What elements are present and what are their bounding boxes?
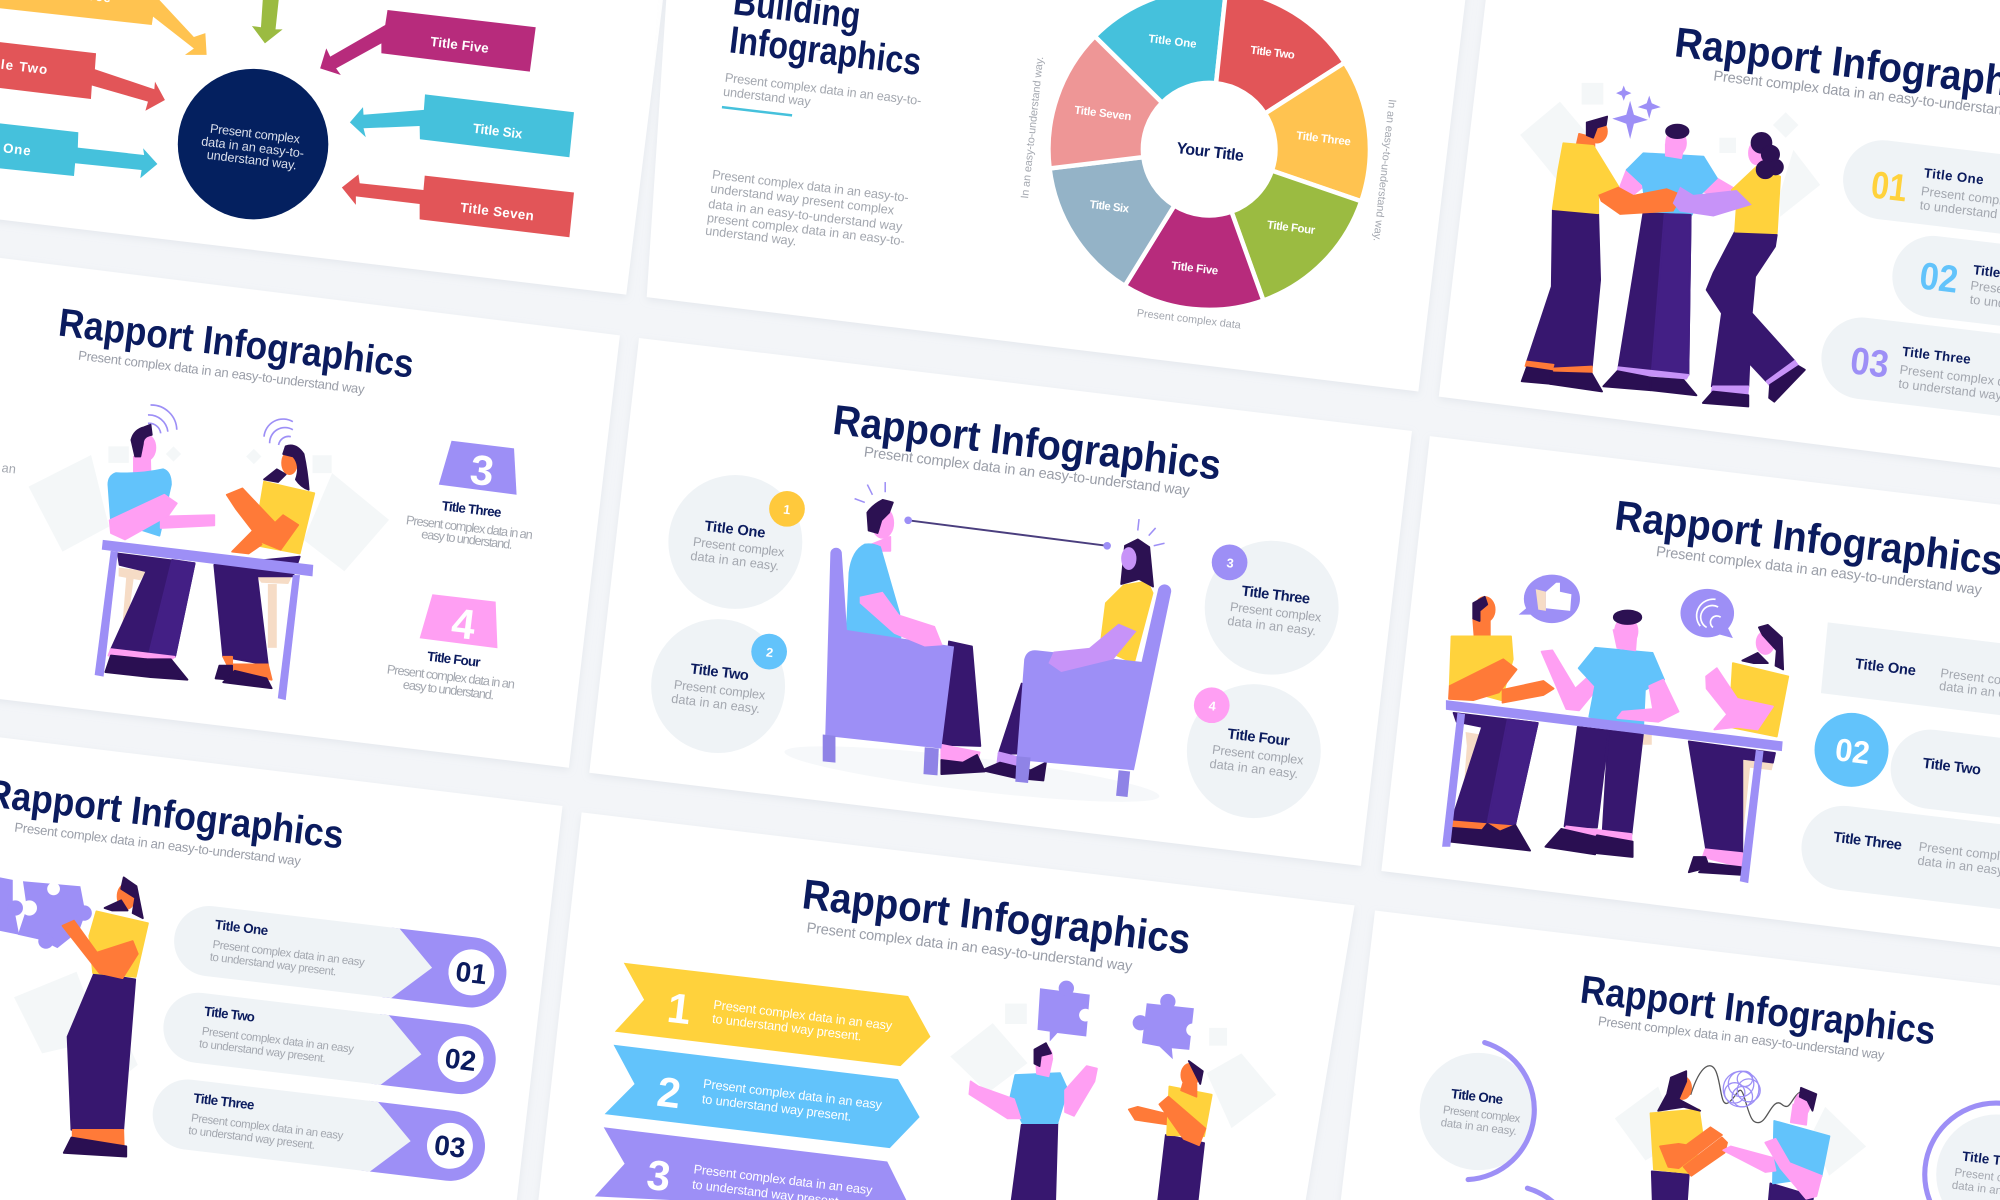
stools <box>1462 732 1774 842</box>
pills: Title One <box>1923 165 1984 187</box>
icon: puzzle pieces <box>0 877 92 949</box>
circle: title two: Title Two <box>690 661 750 684</box>
body text <box>704 167 909 248</box>
heading <box>727 0 924 84</box>
pill: title one: 01 <box>454 956 489 990</box>
row: title two <box>1815 713 2000 834</box>
circle: title three: Present complex <box>1229 599 1323 625</box>
circle: title one: data in an easy. <box>690 548 780 573</box>
pills: 03 <box>1848 339 1891 387</box>
subheading: understand way <box>722 84 812 109</box>
person: left sitter <box>847 500 985 774</box>
card: four: 4 <box>449 599 478 649</box>
circle: title one: data in an easy. <box>1440 1117 1517 1138</box>
pill: title two <box>159 989 500 1098</box>
body text: data in an easy-to-understand way <box>708 196 904 234</box>
subheading: Present complex data in an easy-to- <box>724 70 922 108</box>
body text: Present complex data in an easy-to- <box>711 167 909 205</box>
donut labels: Title Four <box>1266 219 1316 237</box>
pills: Title Three <box>1901 344 1972 367</box>
ribbon: three: 3 <box>644 1151 673 1200</box>
icon: sound bubble <box>1680 589 1734 638</box>
circle: title one: 1 <box>782 502 791 517</box>
circle: title one: Present complex <box>692 534 786 560</box>
stools <box>119 567 292 648</box>
card: three: easy to understand. <box>421 526 514 552</box>
pills: 01 <box>1869 164 1909 210</box>
pills: 02 <box>1917 254 1960 302</box>
ribbon: one: to understand way present. <box>711 1011 863 1044</box>
person: right man <box>1129 1061 1212 1200</box>
title: Rapport Infographics <box>1578 968 1938 1054</box>
card: four: easy to understand. <box>402 677 495 702</box>
arm: left sitter <box>860 592 943 647</box>
circle: title three: 3 <box>1226 555 1235 571</box>
donut labels: Title Seven <box>1074 105 1132 123</box>
donut labels: Title Five <box>1171 260 1219 278</box>
ribbon: one <box>615 963 930 1066</box>
person: left man <box>1449 597 1554 851</box>
person: left man <box>969 1043 1097 1200</box>
subtitle: Present complex data in an easy-to-understand way <box>1597 1013 1886 1062</box>
circle: title one: Title One <box>1450 1086 1504 1107</box>
pill: title three: Title Three <box>193 1090 255 1113</box>
row: title two: Title Two <box>1922 756 1982 779</box>
panel: building infographics wheel slide <box>647 0 1467 391</box>
donut labels: Your Title <box>1176 140 1245 165</box>
icon: puzzle bubble right <box>1133 994 1199 1059</box>
side captions: Present complex data <box>1136 307 1242 332</box>
panel: meeting table slide <box>1381 436 2000 949</box>
ribbon: three: Present complex data in an easy <box>693 1161 874 1198</box>
body text: present complex data in an easy-to- <box>706 210 906 248</box>
panel: talking at table slide <box>0 256 620 768</box>
arrow: title two <box>0 42 165 111</box>
sparks <box>855 482 1165 546</box>
person: standing woman <box>62 877 148 1157</box>
card: three <box>405 441 534 552</box>
panel: puzzle holder slide <box>0 736 563 1200</box>
center circle: data in an easy-to- <box>201 133 305 161</box>
circle: title three <box>1205 541 1339 675</box>
person: left man <box>105 425 214 680</box>
side captions: In an easy-to-understand way. <box>1371 99 1398 242</box>
table <box>95 540 313 700</box>
person: left man <box>1522 117 1618 391</box>
arrow: title five <box>320 10 536 75</box>
pills: to understand way <box>1898 376 2000 403</box>
chair: right <box>1015 584 1171 797</box>
circle: title one <box>1420 1043 1537 1180</box>
pill: title one <box>170 902 510 1011</box>
icon: stars <box>1612 85 1661 139</box>
pill: title two: Present complex data in an easy <box>201 1026 355 1056</box>
card: three: Present complex data in an <box>405 512 534 542</box>
person: right woman <box>214 445 314 688</box>
circle: title four: data in an easy. <box>1209 756 1299 781</box>
person: woman <box>1651 1071 1727 1200</box>
accent line <box>722 107 792 115</box>
circle: title one <box>668 475 805 609</box>
card: four <box>386 594 516 702</box>
circle: title one: Present complex <box>1442 1104 1521 1126</box>
panel: tangled thoughts slide <box>1339 911 2000 1200</box>
pill: title three: to understand way present. <box>188 1125 316 1152</box>
decor shapes <box>1520 83 1820 217</box>
arrow: title one <box>0 123 157 178</box>
ribbon: two: to understand way present. <box>701 1091 852 1124</box>
ribbon: two: Present complex data in an easy <box>702 1076 883 1112</box>
side captions <box>1019 56 1398 332</box>
subtitle: Present complex data in an easy-to-understand way <box>806 920 1134 975</box>
person: right woman <box>1689 625 1788 875</box>
circle: title three: data in an easy. <box>1227 613 1317 638</box>
title: Rapport Infographics <box>56 301 416 387</box>
person: right woman <box>1703 133 1805 407</box>
icon: sound waves right <box>264 419 293 445</box>
panel: arrows slide <box>0 0 665 295</box>
title: Rapport Infographics <box>800 870 1193 963</box>
center circle <box>178 69 328 219</box>
body text: understand way present complex <box>710 181 896 218</box>
donut labels: Title Three <box>1296 130 1351 148</box>
donut chart <box>1048 0 1370 310</box>
decor shapes <box>1615 1087 1866 1176</box>
arm: orange <box>1598 187 1683 215</box>
circle: title four: Present complex <box>1211 742 1305 768</box>
clipped caption: an <box>1 460 17 476</box>
circle: title four: Title Four <box>1227 726 1291 750</box>
arm: right sitter <box>1048 624 1136 672</box>
icon: tangled wire <box>1691 1066 1801 1123</box>
pill: title one: to understand way present. <box>209 951 337 979</box>
pill: title three: Present complex data in an easy <box>190 1112 344 1142</box>
card: four: Title Four <box>426 649 481 670</box>
circle: title four <box>1187 684 1321 818</box>
center circle: understand way. <box>206 147 298 172</box>
chair: left <box>823 548 954 775</box>
heading: Infographics <box>727 19 924 84</box>
panel: ribbon slide <box>537 812 1355 1200</box>
subtitle: Present complex data in an easy-to-understand way <box>1655 544 1983 599</box>
body text: understand way. <box>704 223 797 248</box>
panel: chairs slide <box>589 338 1412 866</box>
icon: sound waves left <box>148 405 177 433</box>
arc: second circle <box>1527 1188 1562 1200</box>
pill: title two: Title Two <box>203 1004 256 1025</box>
ribbon: one: Present complex data in an easy <box>713 997 894 1033</box>
subtitle: Present complex data in an easy-to-understand way <box>14 820 302 869</box>
pill: title one: Present complex data in an easy <box>212 939 366 969</box>
panel: group of three slide <box>1439 0 2000 469</box>
circle: title four: 4 <box>1208 698 1218 714</box>
person: center man <box>1542 610 1679 857</box>
pill: title three <box>149 1076 489 1185</box>
subtitle: Present complex data in an easy-to-understand way <box>863 445 1191 499</box>
icon: puzzle bubble left <box>1038 981 1092 1041</box>
decor shapes <box>29 446 389 571</box>
pill: title one: Title One <box>214 917 269 938</box>
person: man <box>1723 1088 1829 1200</box>
row: title one: Title One <box>1854 656 1917 679</box>
circle: title three: Title Three <box>1241 584 1311 608</box>
circle: title three <box>1925 1103 2000 1200</box>
card: four: Present complex data in an <box>386 661 516 692</box>
center circle: Present complex <box>209 121 302 146</box>
donut labels: Title Two <box>1250 45 1295 62</box>
arrow: title three <box>0 0 207 55</box>
arrow: title seven <box>342 174 574 237</box>
ribbon: one: 1 <box>665 984 694 1033</box>
row: title two: 02 <box>1833 731 1872 771</box>
pill: title two: 02 <box>443 1043 478 1077</box>
arrow: title four <box>252 0 283 43</box>
person: right sitter <box>982 539 1153 780</box>
circle: title one: Title One <box>704 519 766 542</box>
card: three: Title Three <box>441 498 502 520</box>
donut labels: Title Six <box>1089 199 1130 216</box>
decor shapes <box>950 1004 1276 1128</box>
arm: lilac <box>1673 187 1752 217</box>
row: title three: Title Three <box>1832 830 1903 854</box>
pills <box>1817 136 2000 429</box>
ribbon: three <box>595 1127 912 1200</box>
ribbon: two: 2 <box>655 1068 683 1117</box>
title: Rapport Infographics <box>831 396 1224 489</box>
arrow: title six <box>350 94 574 157</box>
subtitle: Present complex data in an easy-to-understand way <box>77 348 366 397</box>
arrow: title five: Title Five <box>429 34 490 56</box>
pill: title two: to understand way present. <box>198 1038 326 1065</box>
decor shapes <box>14 972 138 1081</box>
circle: title two: data in an easy. <box>671 691 761 716</box>
donut labels <box>1074 33 1351 278</box>
person: center man <box>1603 124 1735 395</box>
side captions: In an easy-to-understand way. <box>1019 56 1046 199</box>
circle: title two: 2 <box>765 644 774 660</box>
floor shadow <box>783 735 1161 813</box>
circle: title two: Present complex <box>673 677 767 703</box>
row: title one <box>1821 622 2000 717</box>
ribbon: two <box>605 1045 920 1148</box>
gaze line <box>904 516 1111 550</box>
donut labels: Title One <box>1148 33 1197 51</box>
table <box>1442 700 1783 883</box>
pill: title three: 03 <box>433 1129 467 1164</box>
card: three: 3 <box>468 445 496 495</box>
arrow: title seven: Title Seven <box>459 200 535 223</box>
row: title three <box>1797 801 2000 924</box>
arrow: title six: Title Six <box>472 121 524 142</box>
icon: thumbs up bubble <box>1519 575 1580 623</box>
circle: title two <box>651 619 787 753</box>
